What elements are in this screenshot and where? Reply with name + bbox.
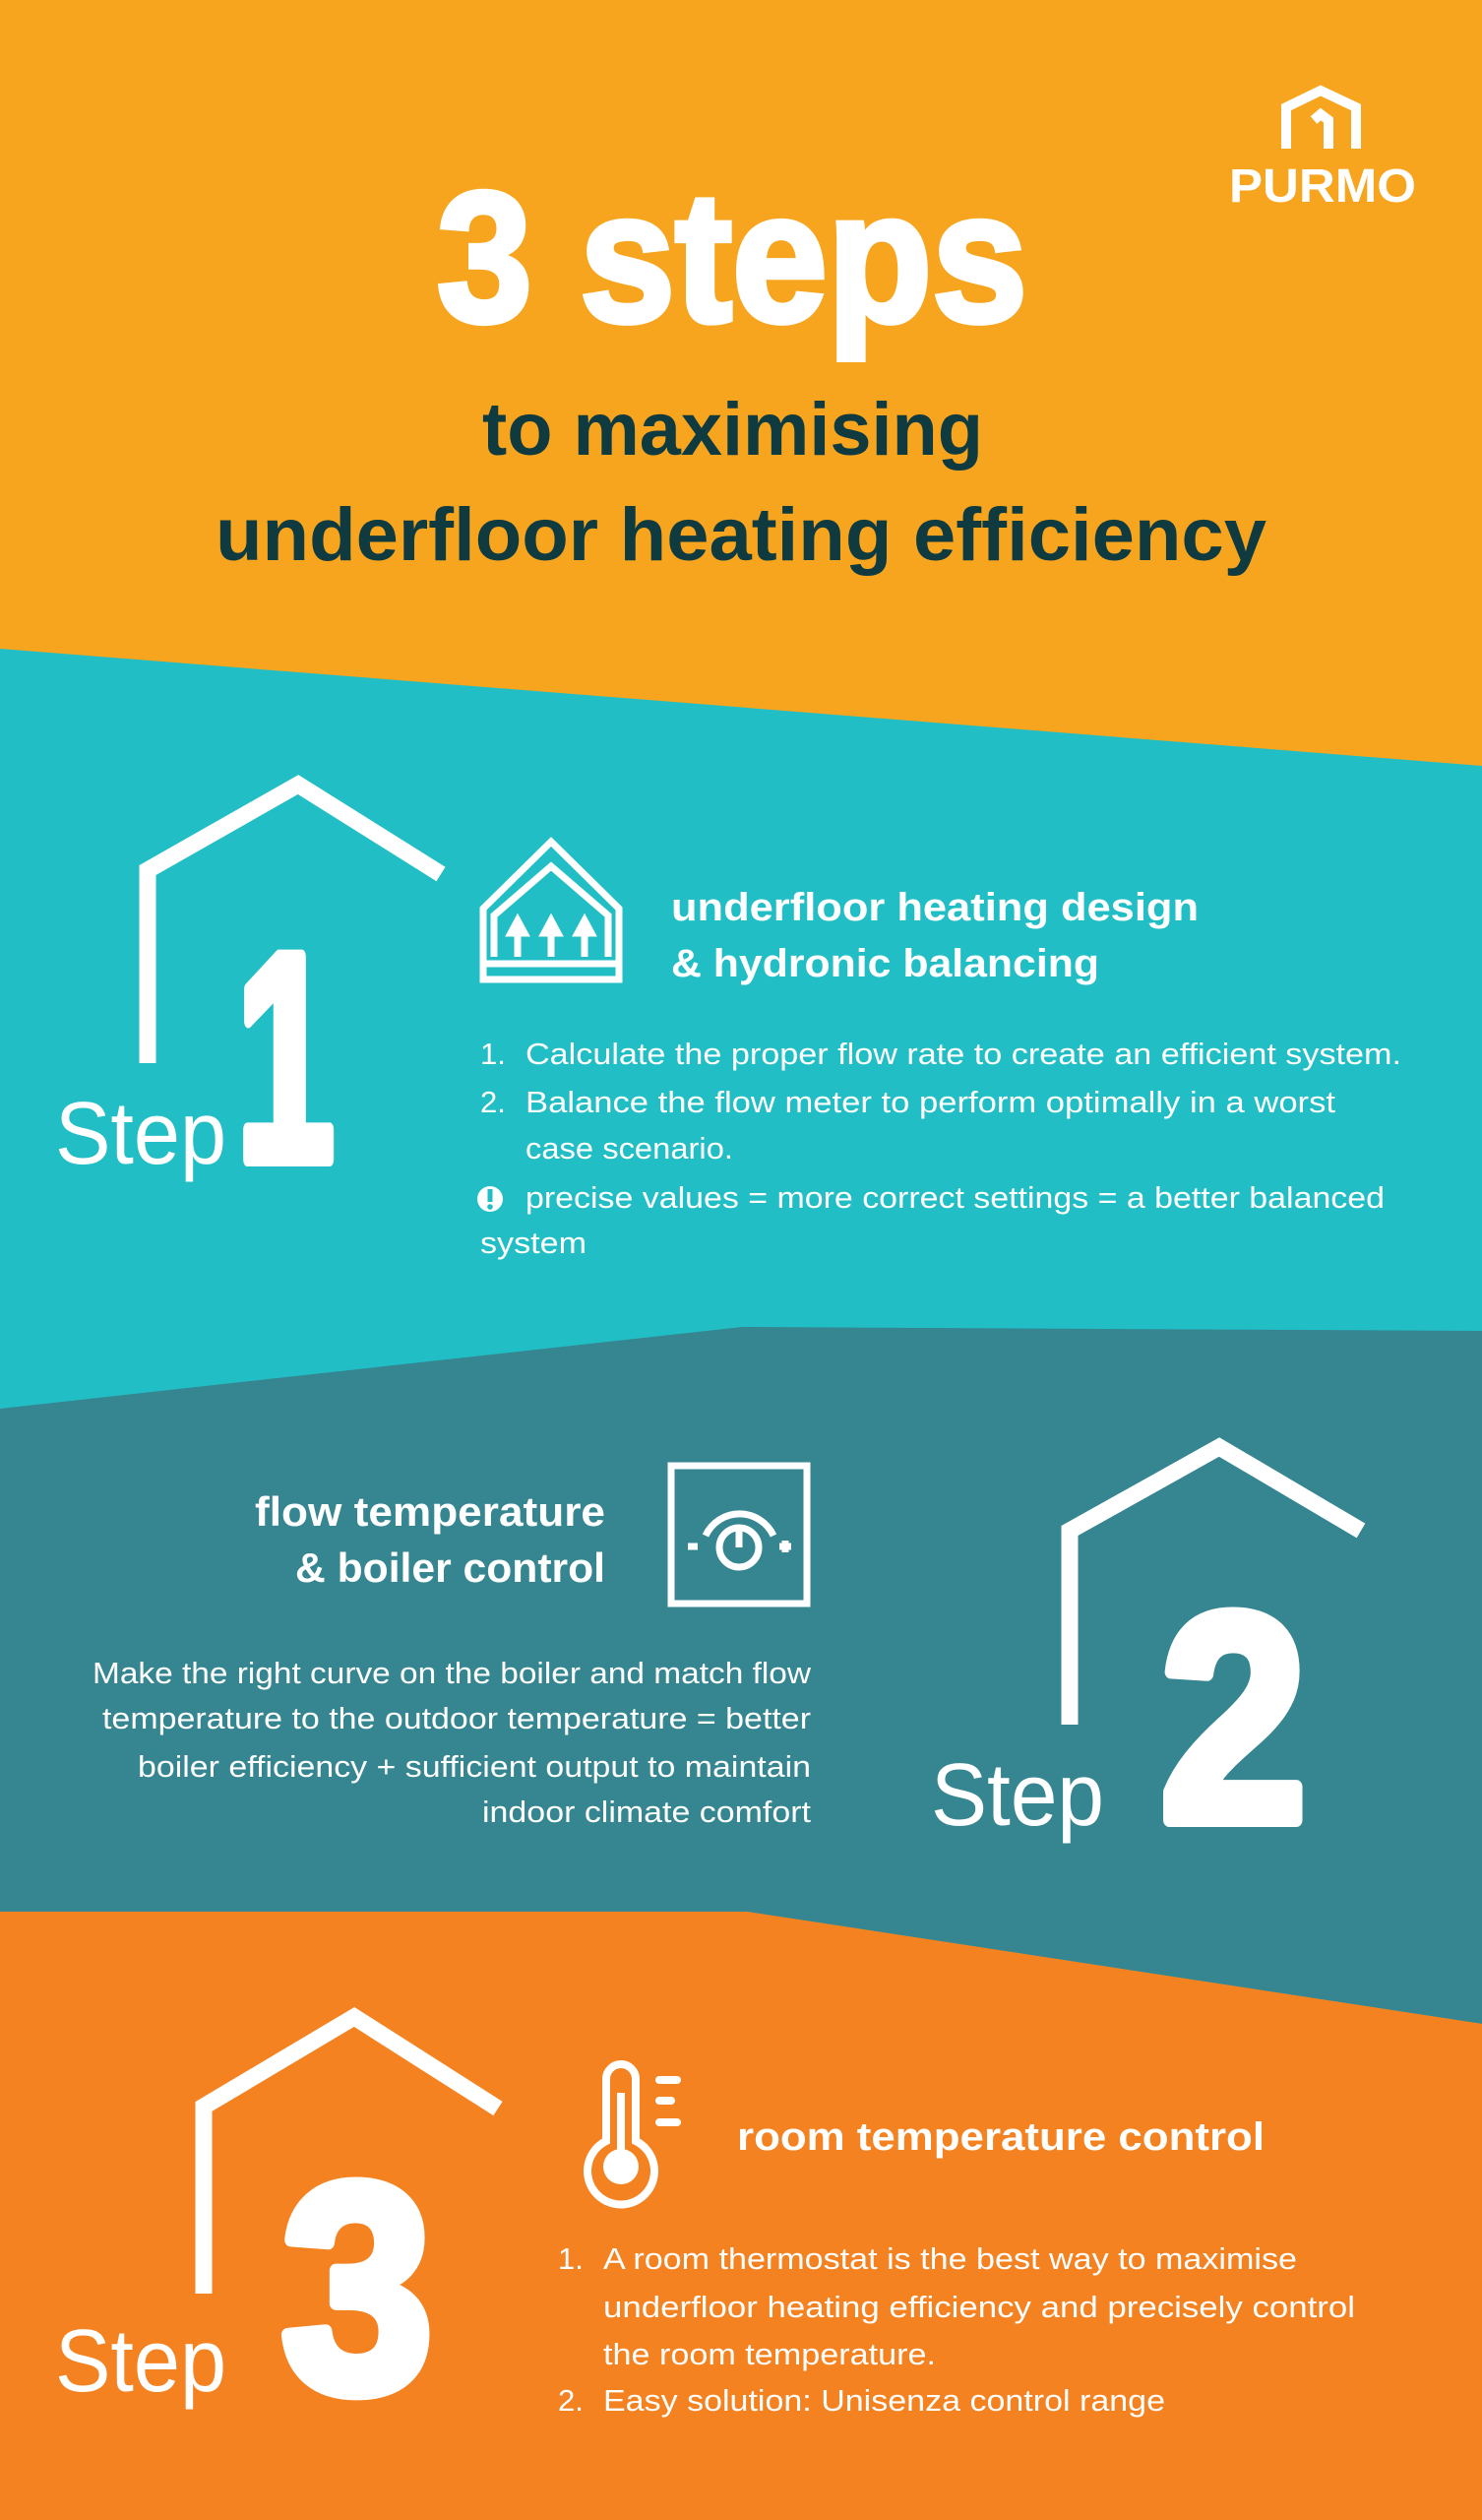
heading 2: flow temperature <box>255 1488 605 1535</box>
house outline 1 <box>148 785 441 1063</box>
list 3: underfloor heating efficiency and precisely control <box>603 2290 1355 2324</box>
paragraph 2: temperature to the outdoor temperature = better <box>102 1701 811 1735</box>
title: 3 steps <box>437 154 1027 360</box>
list 1: 1. <box>480 1037 506 1071</box>
digit 2: 2 <box>1160 1552 1307 1883</box>
list 1: case scenario. <box>525 1131 733 1166</box>
list 1: precise values = more correct settings = a better balanced <box>525 1180 1385 1215</box>
panel: step 2 <box>93 1447 1361 1883</box>
step 1 label: Step <box>55 1085 226 1183</box>
digit 3: 3 <box>281 2122 433 2453</box>
heading 1: underfloor heating design <box>671 886 1199 929</box>
icon: boiler control <box>671 1466 807 1604</box>
icon: house heating <box>483 842 619 981</box>
list 3: A room thermostat is the best way to maximise <box>603 2241 1297 2276</box>
heading 3: room temperature control <box>737 2115 1265 2159</box>
list 3: Easy solution: Unisenza control range <box>603 2383 1165 2418</box>
paragraph 2 <box>93 1656 812 1829</box>
subtitle: underfloor heating efficiency <box>216 493 1266 577</box>
panel: step 1: & hydronic balancing <box>671 942 1099 985</box>
step 2 label: Step <box>931 1746 1104 1845</box>
list 3: 1. <box>558 2241 584 2276</box>
house outline 3 <box>204 2017 498 2294</box>
list 1 <box>477 1037 1401 1260</box>
house outline 2 <box>1070 1447 1361 1725</box>
step 3 label: Step <box>55 2312 226 2411</box>
list 1: system <box>480 1226 587 1260</box>
subtitle: to maximising <box>482 388 983 472</box>
icon: thermometer <box>587 2064 681 2205</box>
subtitle <box>216 388 1266 577</box>
paragraph 2: Make the right curve on the boiler and match flow <box>93 1656 812 1690</box>
list 3: 2. <box>558 2383 584 2418</box>
list 1: 2. <box>480 1085 506 1119</box>
list 1: Balance the flow meter to perform optimally in a worst <box>525 1085 1335 1119</box>
list 3 <box>558 2241 1355 2418</box>
list 1: Calculate the proper flow rate to create an efficient system. <box>525 1037 1401 1071</box>
list 3: the room temperature. <box>603 2337 936 2371</box>
digit 1: 1 <box>236 892 335 1223</box>
logo: purmo <box>1229 91 1416 213</box>
paragraph 2: boiler efficiency + sufficient output to maintain <box>138 1749 811 1784</box>
panel: step 1 <box>55 785 1401 1260</box>
paragraph 2: indoor climate comfort <box>482 1795 811 1829</box>
panel: step 3 <box>55 2017 1355 2453</box>
logo: purmo: PURMO <box>1229 160 1416 213</box>
panel: step 2: & boiler control <box>295 1544 605 1591</box>
